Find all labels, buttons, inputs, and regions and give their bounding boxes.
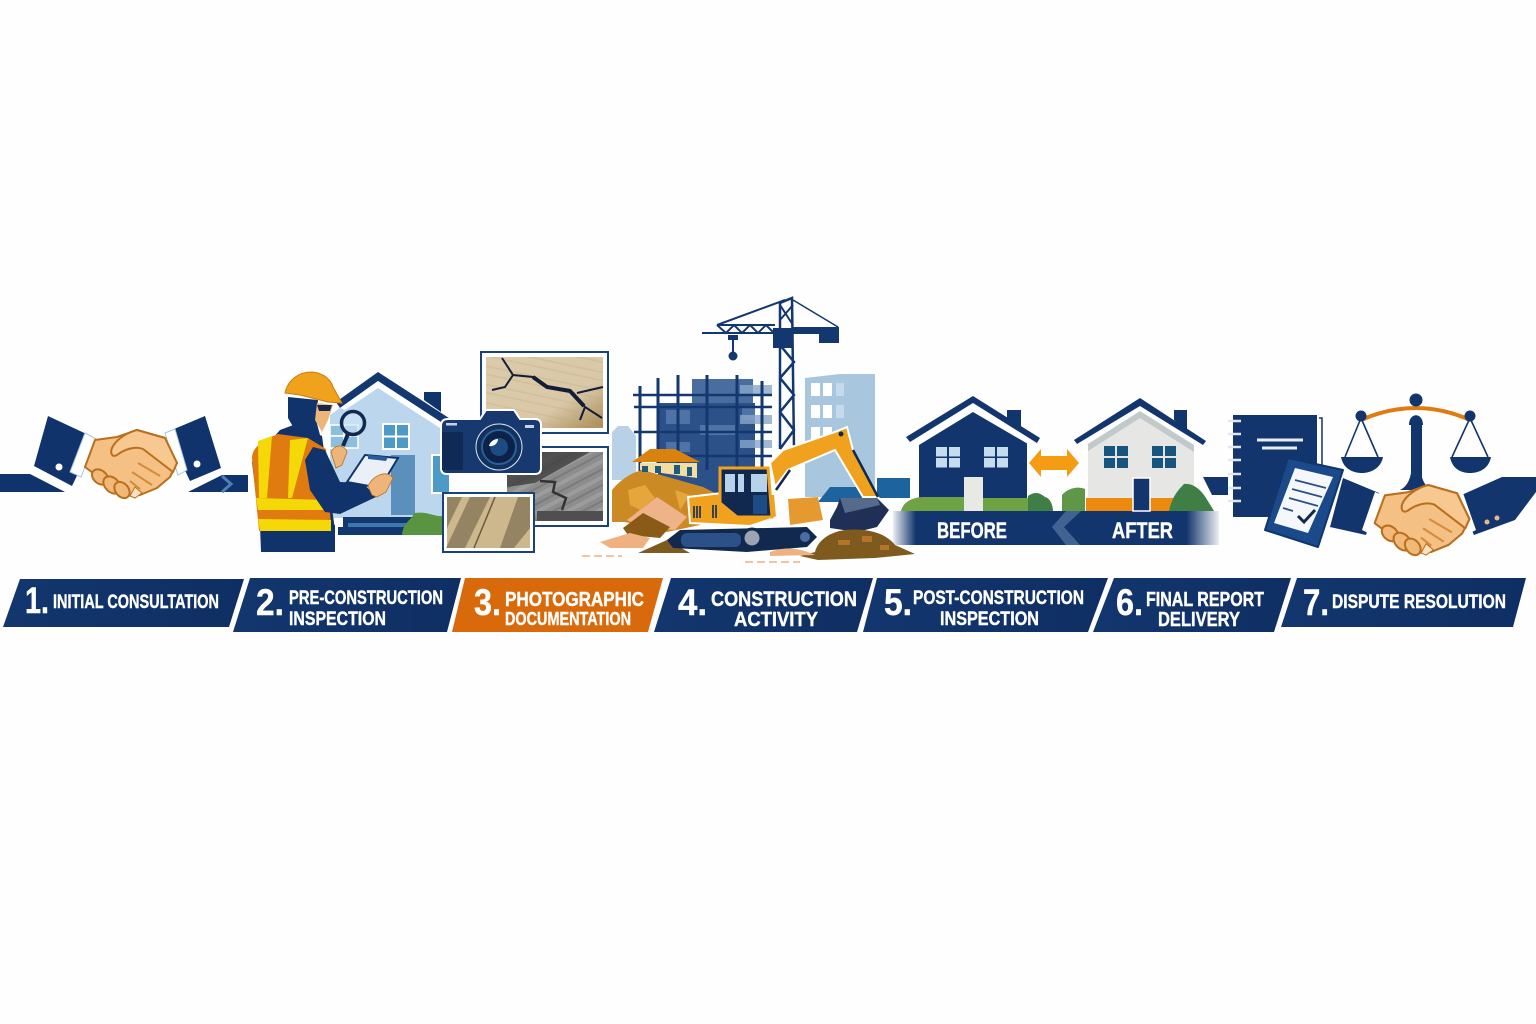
banner 3: 3. [474, 582, 501, 623]
banner 2 [233, 578, 461, 632]
hard hat [285, 372, 342, 403]
left sleeve [1330, 478, 1382, 535]
banner 5 [863, 578, 1108, 632]
crane hook [728, 335, 738, 360]
inspector [252, 372, 398, 552]
banner 3: DOCUMENTATION [505, 609, 631, 629]
scales [1341, 394, 1491, 490]
left window [330, 425, 358, 448]
banner 6: FINAL REPORT [1146, 589, 1264, 611]
banner 4 [654, 578, 873, 632]
left connector bar [0, 474, 65, 492]
tracks [667, 527, 817, 552]
label before: BEFORE [937, 518, 1007, 543]
right connector bar with chevron [188, 475, 248, 492]
banner 5: 5. [884, 582, 912, 623]
notebook [1228, 415, 1322, 517]
banner 5: POST-CONSTRUCTION [913, 588, 1084, 609]
after house [1062, 398, 1214, 511]
distant skyline [612, 426, 636, 480]
report tablet [1265, 458, 1343, 547]
before door [964, 477, 983, 511]
banner 1: 1. [25, 580, 49, 621]
window [382, 423, 410, 450]
counterweight block [788, 497, 823, 525]
bucket [830, 498, 889, 532]
orange base [1086, 498, 1180, 511]
tower crane [702, 298, 839, 449]
after door [1133, 478, 1150, 511]
clasped hands [85, 430, 177, 501]
step 7 illustration: scales of justice and handshake [1265, 394, 1536, 558]
before windows [936, 447, 1008, 468]
banner 7 [1281, 578, 1526, 627]
house [330, 372, 452, 535]
arm [305, 447, 376, 514]
before after band [893, 511, 1219, 545]
after windows [1104, 446, 1176, 468]
lawn and bushes [901, 497, 1028, 511]
after bushes [1062, 488, 1085, 511]
banner 2: INSPECTION [289, 609, 386, 630]
step 2 illustration: inspector and house [252, 372, 452, 552]
body [688, 493, 777, 526]
crack photo grey [507, 447, 608, 526]
dirt pile [800, 530, 915, 560]
banner 4: CONSTRUCTION [711, 588, 857, 611]
hi-vis vest [252, 434, 331, 531]
before house [901, 396, 1053, 511]
excavator [667, 427, 889, 552]
banner 5: INSPECTION [940, 609, 1039, 630]
head [288, 397, 320, 435]
clasped hands [1375, 485, 1469, 558]
step 1 illustration: handshake [0, 416, 248, 501]
banner 6: 6. [1116, 582, 1143, 623]
clipboard [347, 455, 398, 497]
connector stub [1203, 477, 1228, 495]
left sleeve [34, 416, 96, 486]
step 6 illustration: report notebook and tablet [1203, 415, 1322, 517]
banner 7: 7. [1303, 582, 1329, 623]
door [391, 455, 415, 515]
crack photo top [481, 352, 608, 433]
step 3 illustration: photos and camera [441, 352, 608, 552]
banner 2: PRE-CONSTRUCTION [289, 588, 443, 609]
step 4 illustration: construction site [582, 298, 915, 562]
cab [720, 468, 772, 517]
step banners [3, 578, 1526, 632]
banner 1: INITIAL CONSULTATION [53, 592, 219, 613]
wood photo [443, 493, 534, 552]
banner 2: 2. [256, 582, 284, 623]
banner 4: 4. [678, 582, 707, 623]
label after: AFTER [1112, 518, 1173, 543]
right sleeve [165, 416, 221, 481]
camera [441, 410, 541, 474]
hill with house [612, 449, 715, 538]
sand spoil [600, 533, 650, 548]
banner 1 [3, 579, 244, 627]
magnifying glass [331, 412, 364, 468]
swap arrow [1029, 449, 1079, 477]
boom [770, 427, 878, 497]
light office building [805, 374, 910, 502]
banner 3 [452, 578, 663, 632]
banner 6: DELIVERY [1158, 609, 1241, 631]
banner 4: ACTIVITY [734, 609, 819, 631]
bush [402, 513, 443, 535]
banner 6 [1093, 578, 1291, 632]
step 5 illustration: before and after houses [893, 396, 1219, 545]
right sleeve [1455, 477, 1536, 535]
building under construction with scaffolding [633, 375, 772, 493]
banner 3: PHOTOGRAPHIC [505, 589, 644, 611]
